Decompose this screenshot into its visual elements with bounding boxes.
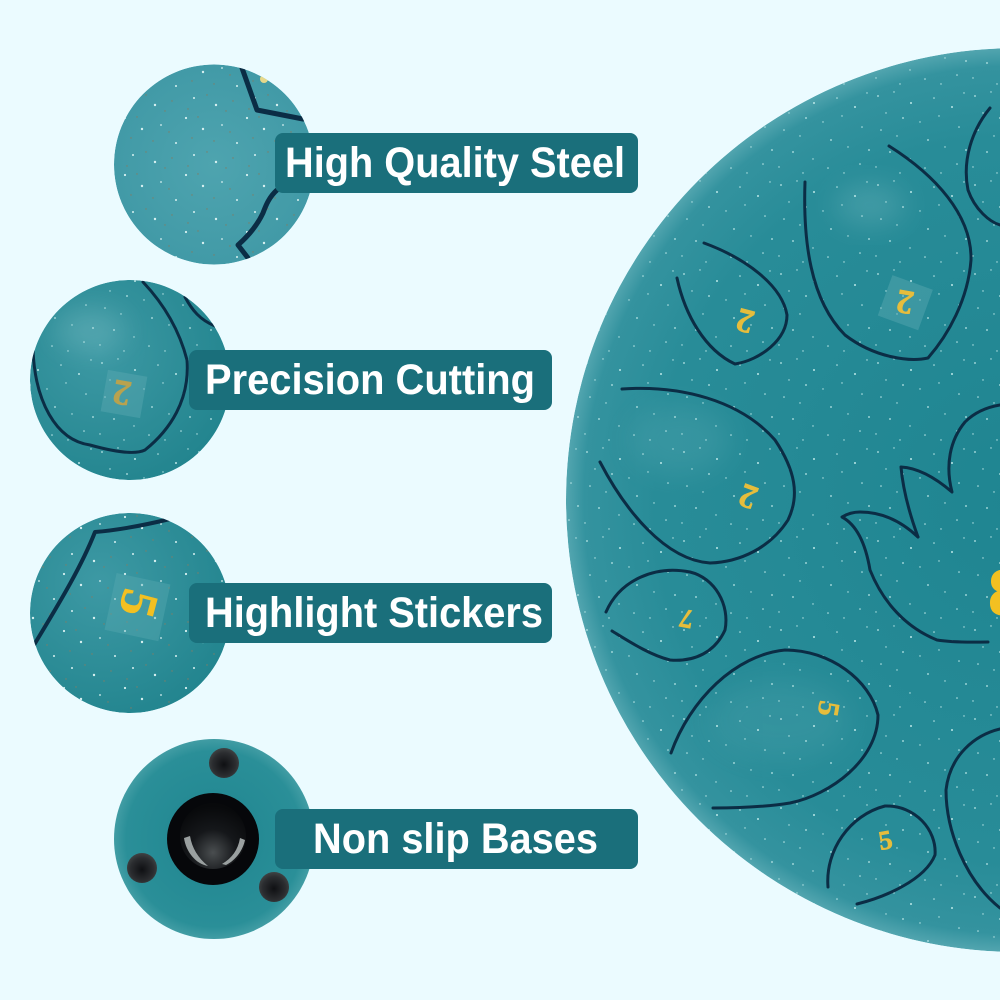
label: Precision Cutting: Precision Cutting	[205, 356, 535, 404]
note stickers: 2	[734, 476, 763, 516]
label: Non slip Bases	[275, 809, 638, 869]
note stickers: 2	[894, 282, 917, 321]
large steel tongue drum	[566, 48, 1000, 952]
rubber feet	[127, 748, 289, 902]
label: Highlight Stickers: Highlight Stickers	[205, 589, 543, 637]
detail circle: high quality steel	[114, 64, 314, 264]
detail circle: highlight stickers: 5	[107, 583, 169, 623]
note stickers: 7	[677, 603, 696, 635]
detail circle: highlight stickers	[30, 513, 230, 713]
label: High Quality Steel: High Quality Steel	[285, 139, 625, 187]
detail circle: non slip bases	[114, 739, 314, 939]
label: Non slip Bases: Non slip Bases	[313, 815, 598, 863]
note stickers: 5	[811, 698, 846, 719]
note stickers	[677, 275, 1000, 856]
note stickers: 5	[876, 824, 895, 856]
note stickers: 2	[732, 300, 758, 340]
detail circle: precision cutting	[30, 280, 230, 480]
detail circle: precision cutting: 2	[110, 372, 134, 414]
tongue cut lines	[600, 108, 1000, 908]
